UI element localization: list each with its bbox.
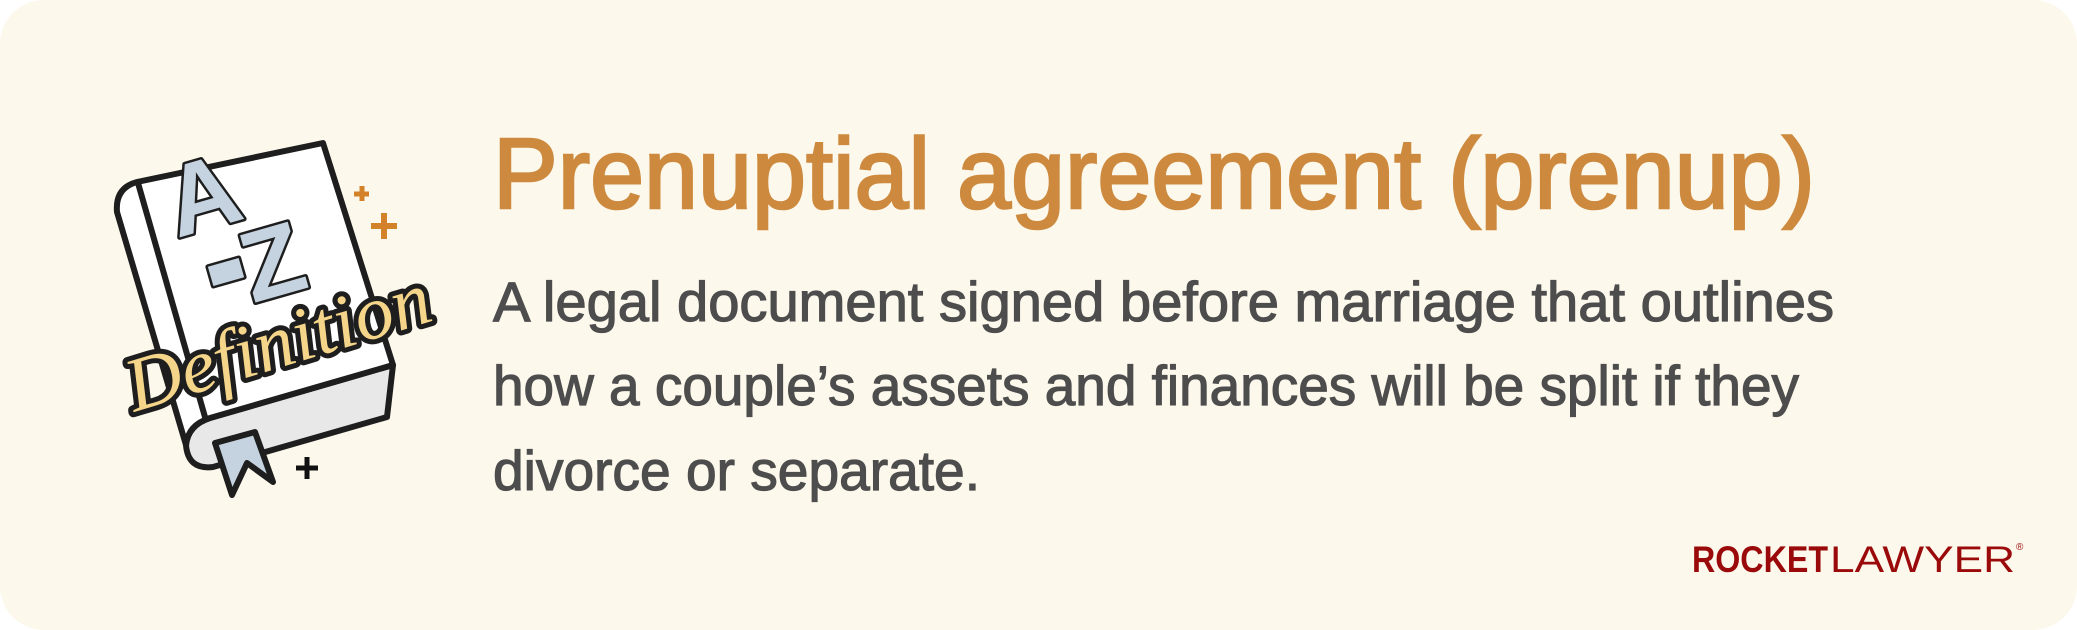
logo: Rocket Lawyer <box>1692 539 2024 580</box>
book pages block <box>186 365 393 467</box>
letters A-Z: A <box>152 132 253 259</box>
title: Prenuptial agreement (prenup) <box>493 118 1815 230</box>
bookmark <box>215 432 273 495</box>
spine line <box>138 183 205 417</box>
letters A-Z <box>152 132 317 325</box>
icon: definition book <box>117 132 393 495</box>
definition script label: Definition <box>114 256 441 429</box>
definition text: how a couple’s assets and finances will be split if they <box>493 354 1799 417</box>
sparkles <box>296 186 397 479</box>
definition text: divorce or separate. <box>493 439 980 502</box>
logo: Rocket Lawyer: ROCKET <box>1692 539 1828 580</box>
book cover <box>117 143 393 445</box>
letters A-Z: Z <box>228 200 317 325</box>
definition text: A legal document signed before marriage that outlines <box>493 270 1834 333</box>
logo: Rocket Lawyer: LAWYER <box>1830 539 2015 580</box>
definition text <box>493 270 1834 502</box>
logo: Rocket Lawyer: ® <box>2016 542 2024 553</box>
